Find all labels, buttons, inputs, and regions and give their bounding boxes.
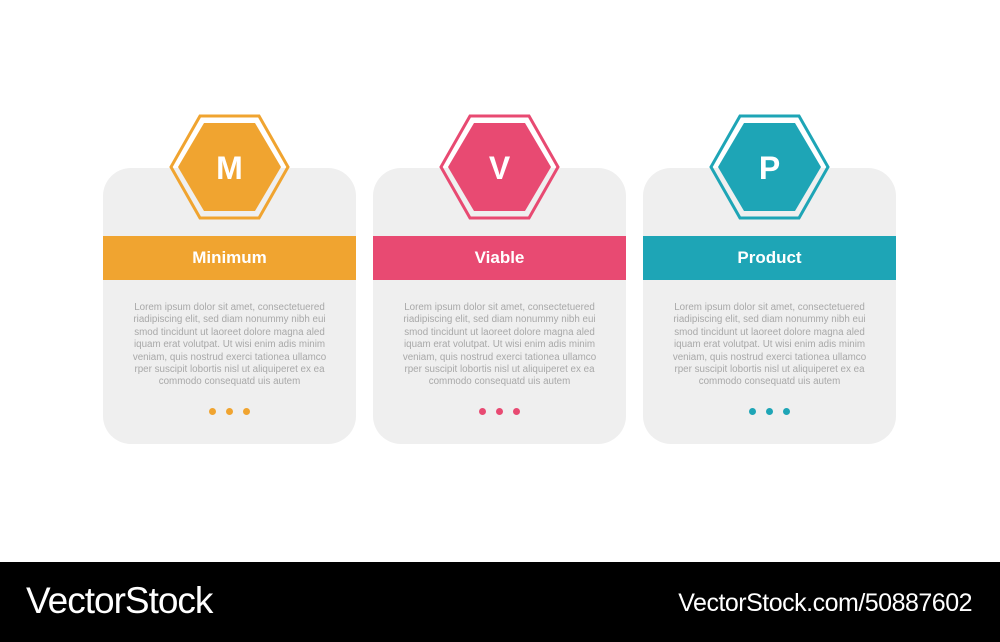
text block: [133, 302, 326, 387]
text block: iquam erat volutpat. Ut wisi enim adis minim: [134, 339, 325, 350]
text block: commodo consequatd uis autem: [159, 376, 300, 387]
text block: veniam, quis nostrud exerci tationea ullamco: [403, 352, 596, 363]
text block: [673, 302, 866, 387]
text block: Lorem ipsum dolor sit amet, consectetuered: [404, 302, 595, 313]
card: viable: [373, 168, 626, 444]
band: Product: [643, 236, 896, 280]
icon: hexagon V: V: [489, 150, 511, 186]
text block: smod tincidunt ut laoreet dolore magna aled: [674, 327, 865, 338]
icon: hexagon P: [709, 114, 830, 220]
dots: [209, 408, 250, 415]
text block: riadipiscing elit, sed diam nonummy nibh eui: [133, 314, 326, 325]
card: minimum: [103, 168, 356, 444]
band: Product: Product: [737, 248, 802, 267]
icon: hexagon M: M: [216, 150, 243, 186]
text block: commodo consequatd uis autem: [699, 376, 840, 387]
band: Minimum: [103, 236, 356, 280]
text block: rper suscipit lobortis nisl ut aliquiperet ex ea: [404, 364, 595, 375]
text block: Lorem ipsum dolor sit amet, consectetuered: [134, 302, 325, 313]
text block: smod tincidunt ut laoreet dolore magna aled: [134, 327, 325, 338]
band: Viable: Viable: [475, 248, 524, 267]
card: product: [643, 168, 896, 444]
text block: iquam erat volutpat. Ut wisi enim adis minim: [674, 339, 865, 350]
dots: [749, 408, 790, 415]
text block: riadipiscing elit, sed diam nonummy nibh eui: [403, 314, 596, 325]
text block: iquam erat volutpat. Ut wisi enim adis minim: [404, 339, 595, 350]
text block: rper suscipit lobortis nisl ut aliquiperet ex ea: [134, 364, 325, 375]
dots: [479, 408, 520, 415]
band: Viable: [373, 236, 626, 280]
icon: hexagon M: [169, 114, 290, 220]
band: Minimum: Minimum: [192, 248, 267, 267]
icon: hexagon V: [439, 114, 560, 220]
footer bar: [0, 562, 1000, 642]
text block: rper suscipit lobortis nisl ut aliquiperet ex ea: [674, 364, 865, 375]
text block: veniam, quis nostrud exerci tationea ullamco: [673, 352, 866, 363]
text block: commodo consequatd uis autem: [429, 376, 570, 387]
icon: hexagon P: P: [759, 150, 780, 186]
text block: [403, 302, 596, 387]
footer logo: VectorStock: [26, 580, 212, 621]
text block: smod tincidunt ut laoreet dolore magna aled: [404, 327, 595, 338]
text block: Lorem ipsum dolor sit amet, consectetuered: [674, 302, 865, 313]
footer url: VectorStock.com/50887602: [678, 589, 972, 617]
text block: veniam, quis nostrud exerci tationea ullamco: [133, 352, 326, 363]
text block: riadipiscing elit, sed diam nonummy nibh eui: [673, 314, 866, 325]
